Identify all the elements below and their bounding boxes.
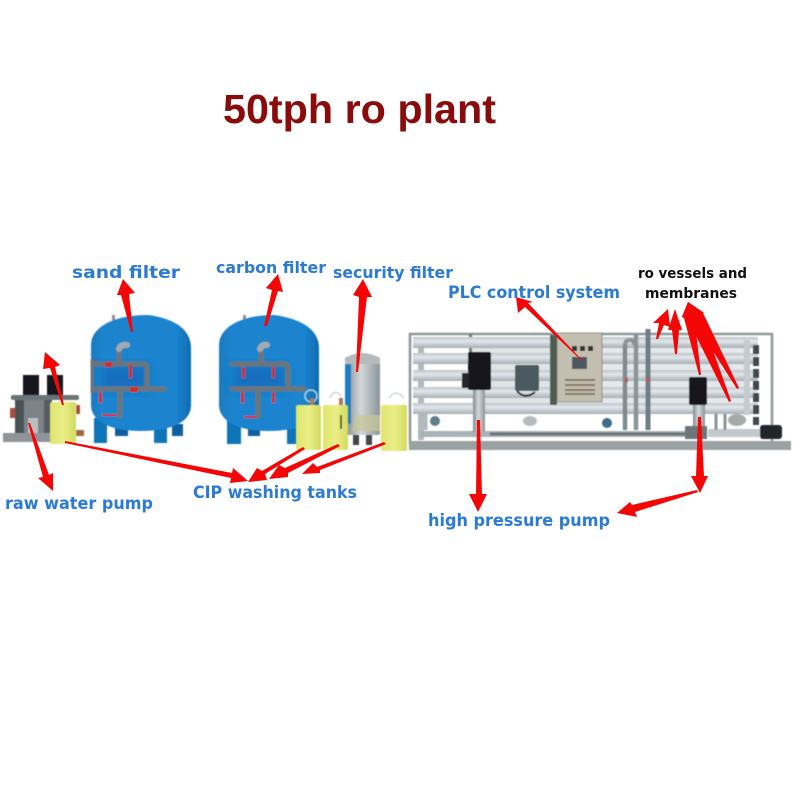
security filter <box>345 353 380 445</box>
label: ro vessels and membranes: ro vessels and <box>638 266 747 282</box>
arrow: security filter <box>353 279 372 372</box>
arrow: sand filter <box>117 279 135 332</box>
carbon filter tank <box>219 315 319 444</box>
arrow: CIP tank 3 <box>269 444 340 479</box>
arrow: CIP tank 4 <box>302 442 386 474</box>
membrane tubes <box>413 337 758 414</box>
label: high pressure pump: high pressure pump <box>428 511 610 531</box>
label: ro vessels and membranes <box>638 266 747 302</box>
title: 50tph ro plant <box>223 86 496 132</box>
tank 1 <box>50 402 76 444</box>
arrow: carbon filter <box>264 274 283 326</box>
arrow: high pressure pump left <box>469 420 487 512</box>
small valves <box>430 414 782 439</box>
label: PLC control system: PLC control system <box>448 283 620 303</box>
arrow: raw pump up <box>43 352 64 405</box>
RO skid <box>409 329 791 450</box>
arrow: CIP tank 1 <box>65 441 248 483</box>
control panel <box>557 333 602 402</box>
label: sand filter: sand filter <box>72 263 181 283</box>
label: CIP washing tanks: CIP washing tanks <box>193 483 357 503</box>
green actuator <box>515 365 539 396</box>
arrow: CIP tank 2 <box>248 447 305 482</box>
dark wiring beside panel <box>550 335 557 405</box>
label: raw water pump: raw water pump <box>5 494 153 514</box>
tank 4 <box>381 393 407 451</box>
raw water pump unit <box>3 375 84 442</box>
sand filter tank <box>91 315 191 443</box>
CIP washing tanks <box>50 392 407 451</box>
right side headers <box>744 340 750 415</box>
arrow: PLC <box>516 297 584 363</box>
high pressure pump 2 <box>685 377 707 439</box>
label: carbon filter: carbon filter <box>216 258 326 277</box>
arrow: raw pump down <box>28 423 53 491</box>
label: security filter: security filter <box>333 263 453 282</box>
high pressure pump 1 <box>462 352 491 432</box>
frame <box>410 334 772 444</box>
tank 2 <box>296 398 321 450</box>
label: ro vessels and membranes: membranes <box>645 286 737 302</box>
lower pipework and base <box>420 329 760 434</box>
arrows: ro vessels and membranes <box>653 302 739 402</box>
gap shading between tubes <box>472 348 557 404</box>
sand filter pipework <box>92 345 164 416</box>
arrow: high pressure pump to label <box>617 490 698 517</box>
carbon filter pipework <box>232 345 304 416</box>
arrow: high pressure pump right <box>691 417 708 493</box>
tank 3 <box>323 392 348 450</box>
